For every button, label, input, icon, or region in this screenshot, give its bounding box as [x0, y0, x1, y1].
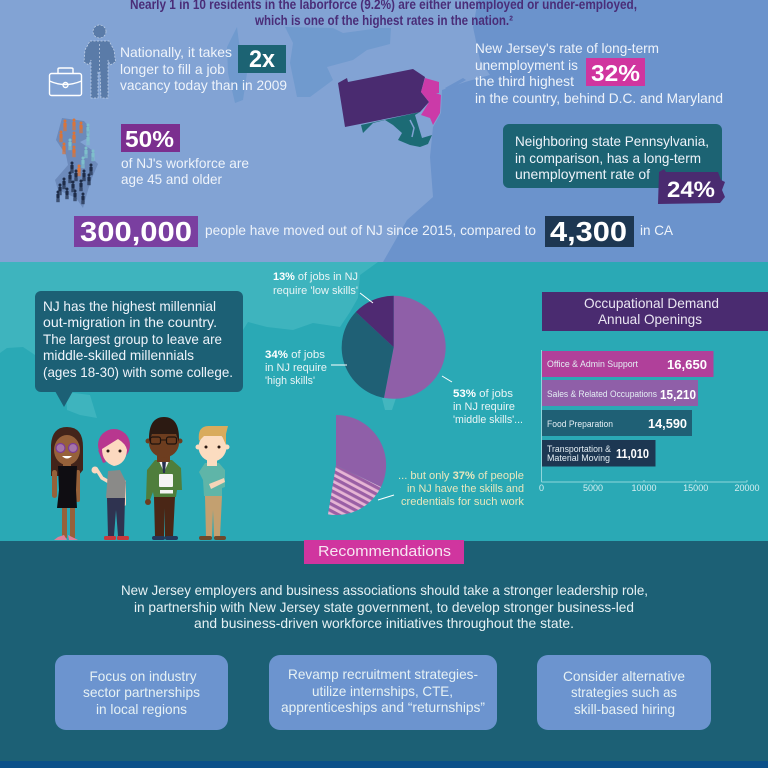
- bar: transportation: Material Moving: [547, 453, 610, 464]
- card: alternative strategies: strategies such as: [571, 684, 677, 700]
- bar chart: annual openings: [539, 350, 760, 493]
- label: 37% with skills: [378, 470, 524, 508]
- illustration: woman with pink hair: [92, 429, 130, 540]
- card: recruitment strategies: apprenticeships and “returnships”: [281, 699, 485, 715]
- label: high skills: in NJ require: [265, 362, 327, 374]
- callout: millennial out-migration: middle-skilled millennials: [43, 347, 194, 363]
- callout: millennial out-migration: The largest group to leave are: [43, 331, 222, 347]
- text: job vacancy stat: [120, 44, 287, 93]
- heading: recommendations: [304, 540, 464, 564]
- slice: middle skills 53%: [384, 296, 446, 399]
- axis labels: 5000: [583, 483, 603, 493]
- label: 37% with skills: credentials for such work: [401, 496, 524, 508]
- callout: Pennsylvania comparison: unemployment rate of: [515, 166, 650, 182]
- text: out-migration comparison: people have moved out of NJ since 2015, compared to: [205, 222, 536, 238]
- label: middle skills: 53% of jobs: [453, 388, 514, 400]
- badge: 24% in Pennsylvania shape: 24%: [667, 177, 715, 202]
- card: alternative strategies: Consider alternative: [563, 668, 685, 684]
- heading: recommendations: Recommendations: [318, 543, 451, 560]
- illustration: man with green sweater: [145, 417, 182, 540]
- text: workforce age stat: of NJ's workforce are: [121, 155, 249, 171]
- card: recruitment strategies: [269, 655, 497, 730]
- background: teal section: [0, 262, 768, 542]
- callout: Pennsylvania comparison: [503, 124, 722, 188]
- card: recruitment strategies: utilize internships, CTE,: [312, 683, 453, 699]
- bar: food preparation: [542, 410, 692, 436]
- label: high skills: 34% of jobs: [265, 349, 326, 361]
- bar: sales: 15,210: [660, 387, 696, 402]
- callout: millennial out-migration: NJ has the highest millennial: [43, 298, 216, 314]
- card: recruitment strategies: Revamp recruitment strategies-: [288, 666, 478, 682]
- text: long-term unemployment: New Jersey's rate of long-term: [475, 40, 659, 56]
- label: 37% with skills: ... but only 37% of people: [398, 470, 524, 482]
- text: recommendation summary: New Jersey employers and business associations should take a stronger leadership role,: [121, 582, 648, 598]
- card: alternative strategies: [537, 655, 711, 730]
- axis labels: 15000: [683, 483, 708, 493]
- axis labels: 0: [539, 483, 544, 493]
- label: high skills: [265, 349, 347, 387]
- axis labels: [539, 483, 760, 493]
- axis labels: 20000: [734, 483, 760, 493]
- label: low skills: require 'low skills': [273, 285, 358, 297]
- state: Maryland: [361, 112, 432, 147]
- text: recommendation summary: and business-driven workforce initiatives throughout the state.: [194, 615, 574, 631]
- background: recommendations section: [0, 541, 768, 762]
- label: low skills: [273, 271, 373, 303]
- badge: 300,000: 300,000: [80, 216, 192, 247]
- title text: which is one of the highest rates in the nation.²: [254, 13, 513, 28]
- title text: [130, 0, 637, 28]
- illustration: blond man with teal shirt: [196, 426, 230, 540]
- icon: New Jersey made of people: [55, 118, 98, 208]
- bar: sales: [542, 380, 698, 406]
- card: industry sector partnerships: sector partnerships: [83, 684, 200, 700]
- card: industry sector partnerships: Focus on industry: [90, 668, 196, 684]
- label: 37% with skills: in NJ have the skills and: [407, 483, 524, 495]
- label: middle skills: in NJ require: [453, 401, 515, 413]
- label: middle skills: 'middle skills'...: [453, 414, 523, 426]
- text: in CA: in CA: [640, 222, 674, 238]
- text: job vacancy stat: longer to fill a job: [120, 61, 225, 77]
- badge: 32%: 32%: [591, 60, 640, 86]
- state: New Jersey: [421, 78, 441, 125]
- label: low skills: 13% of jobs in NJ: [273, 271, 358, 283]
- icon: person with dashed outline: [84, 25, 116, 98]
- callout: millennial out-migration: (ages 18-30) with some college.: [43, 364, 233, 380]
- map: Pennsylvania, Maryland and New Jersey: [338, 69, 441, 147]
- pie chart: middle-skill share with credentials: [328, 415, 386, 515]
- text: recommendation summary: in partnership with New Jersey state government, to develop stronger business-led: [134, 599, 634, 615]
- bar: food preparation: 14,590: [648, 416, 687, 431]
- text: workforce age stat: [121, 155, 249, 187]
- text: job vacancy stat: Nationally, it takes: [120, 44, 232, 60]
- axis labels: 10000: [631, 483, 657, 493]
- slice: high skills 34%: [342, 312, 394, 398]
- text: long-term unemployment: [475, 40, 723, 106]
- label: high skills: 'high skills': [265, 375, 315, 387]
- text: long-term unemployment: unemployment is: [475, 57, 578, 73]
- bar: office and admin: Office & Admin Support: [547, 359, 638, 370]
- heading: occupational demand: Annual Openings: [598, 311, 702, 327]
- bar: transportation: 11,010: [616, 447, 649, 461]
- text: recommendation summary: [121, 582, 648, 631]
- bar: sales: Sales & Related Occupations: [547, 389, 657, 400]
- heading: occupational demand: Occupational Demand: [584, 295, 719, 311]
- callout: Pennsylvania comparison: in comparison, has a long-term: [515, 150, 701, 166]
- card: industry sector partnerships: [55, 655, 228, 730]
- bar: food preparation: Food Preparation: [547, 419, 613, 430]
- callout: Pennsylvania comparison: Neighboring state Pennsylvania,: [515, 133, 709, 149]
- text: job vacancy stat: vacancy today than in 2009: [120, 77, 287, 93]
- bar: office and admin: 16,650: [667, 357, 707, 372]
- bottom bar: [0, 761, 768, 768]
- badge: 2x: [238, 45, 286, 73]
- bar: transportation: Transportation &: [547, 444, 612, 455]
- bar: transportation: [542, 440, 656, 466]
- badge: 4,300: 4,300: [550, 216, 627, 247]
- badge: 24% in Pennsylvania shape: [658, 169, 725, 204]
- text: long-term unemployment: the third highest: [475, 73, 574, 89]
- background: blue map section: [0, 0, 768, 263]
- badge: 2x: 2x: [249, 46, 276, 73]
- text: workforce age stat: age 45 and older: [121, 171, 222, 187]
- slice: low skills 13%: [356, 296, 394, 347]
- badge: 50%: 50%: [125, 126, 174, 152]
- pie chart: jobs by skill level: [342, 296, 446, 399]
- bar: office and admin: [542, 351, 714, 377]
- icon: briefcase: [50, 68, 82, 96]
- illustration: woman with glasses: [51, 427, 83, 540]
- card: alternative strategies: skill-based hiring: [574, 701, 675, 717]
- heading: occupational demand: [542, 292, 768, 331]
- text: long-term unemployment: in the country, behind D.C. and Maryland: [475, 90, 723, 106]
- callout: millennial out-migration: [35, 291, 243, 407]
- state: Pennsylvania: [338, 69, 429, 127]
- card: industry sector partnerships: in local regions: [96, 701, 187, 717]
- label: middle skills: [442, 376, 523, 426]
- callout: millennial out-migration: out-migration in the country.: [43, 314, 217, 330]
